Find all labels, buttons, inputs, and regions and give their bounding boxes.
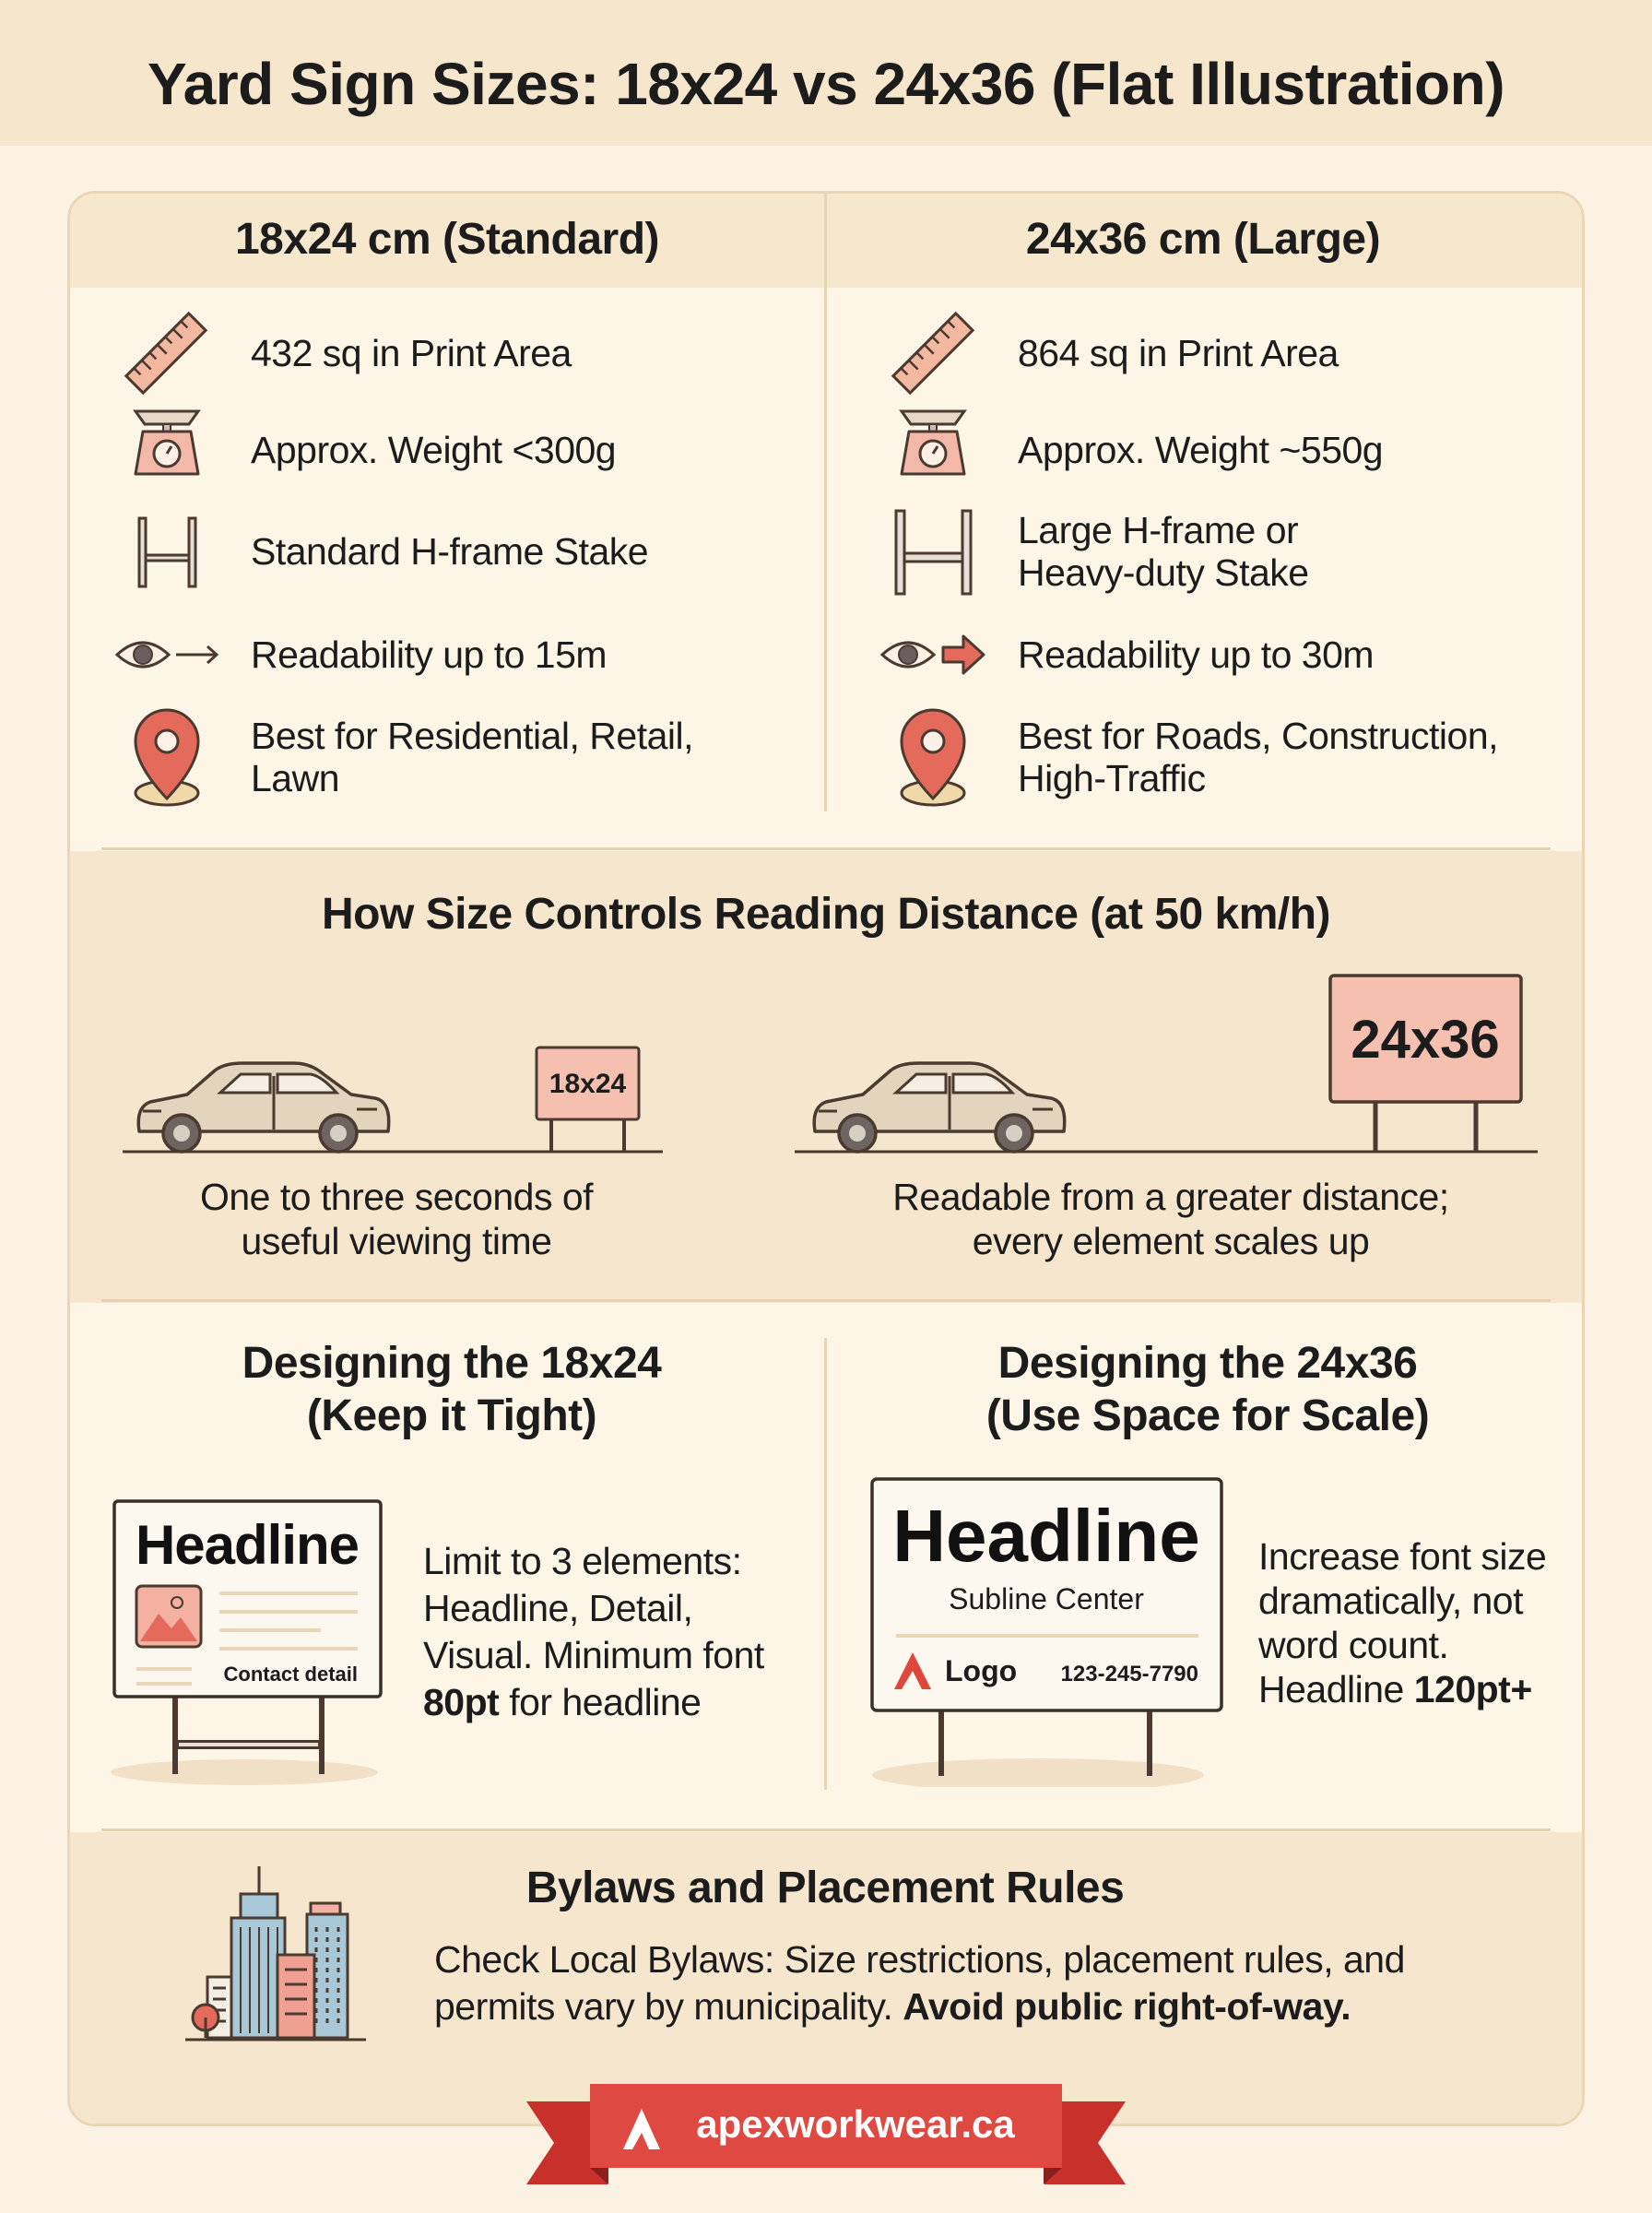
text: large sign tips: dramatically, not [1258,1580,1523,1622]
title band [0,0,1652,146]
heading: 18x24 standard: 18x24 cm (Standard) [235,215,659,264]
icon: scale left [136,411,198,474]
icon: pin left [136,710,198,805]
heading: designing 18x24: (Keep it Tight) [307,1391,596,1440]
text: small sign tips: Visual. Minimum font [423,1634,764,1676]
caption left [200,1176,594,1262]
text: bylaws body: permits vary by municipality. Avoid public right-of-way. [434,1985,1351,2028]
icon: pin right [902,710,964,805]
large sign mockup: 123-245-7790 [1061,1662,1198,1686]
large sign mockup: Logo [945,1654,1017,1687]
text: left features: Lawn [251,757,339,799]
ribbon: brand [526,2084,1126,2184]
text: left features: Standard H-frame Stake [251,530,648,573]
large sign mockup: Headline [892,1495,1200,1577]
small sign mockup: Headline [136,1514,359,1576]
large sign 24x36: 24x36 [1351,1010,1500,1070]
text: right features: 864 sq in Print Area [1018,332,1339,374]
text: bylaws body [434,1938,1405,2028]
caption right [892,1176,1449,1262]
icon: scale right [902,411,964,474]
header band [70,194,1587,288]
heading: designing 24x36 [986,1339,1429,1440]
text: large sign tips: Increase font size [1258,1535,1546,1578]
text: left features: 432 sq in Print Area [251,332,572,374]
heading: reading distance: How Size Controls Reading Distance (at 50 km/h) [322,890,1330,939]
text: small sign tips [423,1540,764,1723]
icon: eye arrow left [117,643,217,667]
small sign mockup: Contact detail [224,1663,358,1686]
road lines [123,1151,1538,1153]
car right [814,1063,1065,1152]
text: right features: Approx. Weight ~550g [1018,429,1383,471]
heading: designing 24x36: Designing the 24x36 [998,1339,1417,1388]
car left [138,1063,389,1152]
text: left features: Best for Residential, Retail, [251,715,693,757]
text: right features: Readability up to 30m [1018,633,1374,676]
text: small sign tips: Limit to 3 elements: [423,1540,741,1582]
icon: ruler right [893,314,973,393]
caption left: useful viewing time [242,1220,551,1262]
text: large sign tips: Headline 120pt+ [1258,1668,1532,1710]
small sign mockup [111,1499,383,1785]
ribbon: brand: apexworkwear.ca [696,2102,1015,2146]
bottom band bg [70,1832,1587,2136]
caption right: Readable from a greater distance; [892,1176,1449,1218]
text: right features: Heavy-duty Stake [1018,551,1309,594]
text: large sign tips: word count. [1258,1624,1448,1666]
text: right features: High-Traffic [1018,757,1206,799]
text: right features [1018,332,1498,799]
text: right features: Large H-frame or [1018,509,1298,551]
text: small sign tips: 80pt for headline [423,1681,701,1723]
icon: H-frame left [139,518,195,586]
heading: bylaws: Bylaws and Placement Rules [526,1864,1124,1912]
heading: designing 24x36: (Use Space for Scale) [986,1391,1429,1440]
text: small sign tips: Headline, Detail, [423,1587,692,1629]
text: left features: Readability up to 15m [251,633,607,676]
heading: designing 18x24 [242,1339,662,1440]
icon: eye arrow right [882,636,984,673]
caption left: One to three seconds of [200,1176,593,1218]
icon: buildings [185,1866,366,2041]
large sign mockup: Subline Center [949,1582,1144,1615]
text: large sign tips [1258,1535,1546,1710]
caption right: every element scales up [973,1220,1369,1262]
heading: 24x36 large: 24x36 cm (Large) [1026,215,1380,264]
title: Yard Sign Sizes: 18x24 vs 24x36 (Flat Illustration) [148,51,1504,117]
text: left features: Approx. Weight <300g [251,429,616,471]
small sign 18x24: 18x24 [549,1069,627,1099]
small sign 18x24 [537,1047,639,1152]
icon: ruler left [126,314,206,393]
icons [114,312,985,806]
large sign 24x36 [1330,976,1521,1152]
icon: H-frame right [896,511,971,594]
text: left features [251,332,693,799]
heading: designing 18x24: Designing the 18x24 [242,1339,661,1388]
middle band bg [70,851,1587,1303]
large sign mockup [870,1477,1223,1787]
reading distance illustration [123,974,1538,1154]
text: right features: Best for Roads, Construction, [1018,715,1498,757]
text: bylaws body: Check Local Bylaws: Size restrictions, placement rules, and [434,1938,1405,1981]
